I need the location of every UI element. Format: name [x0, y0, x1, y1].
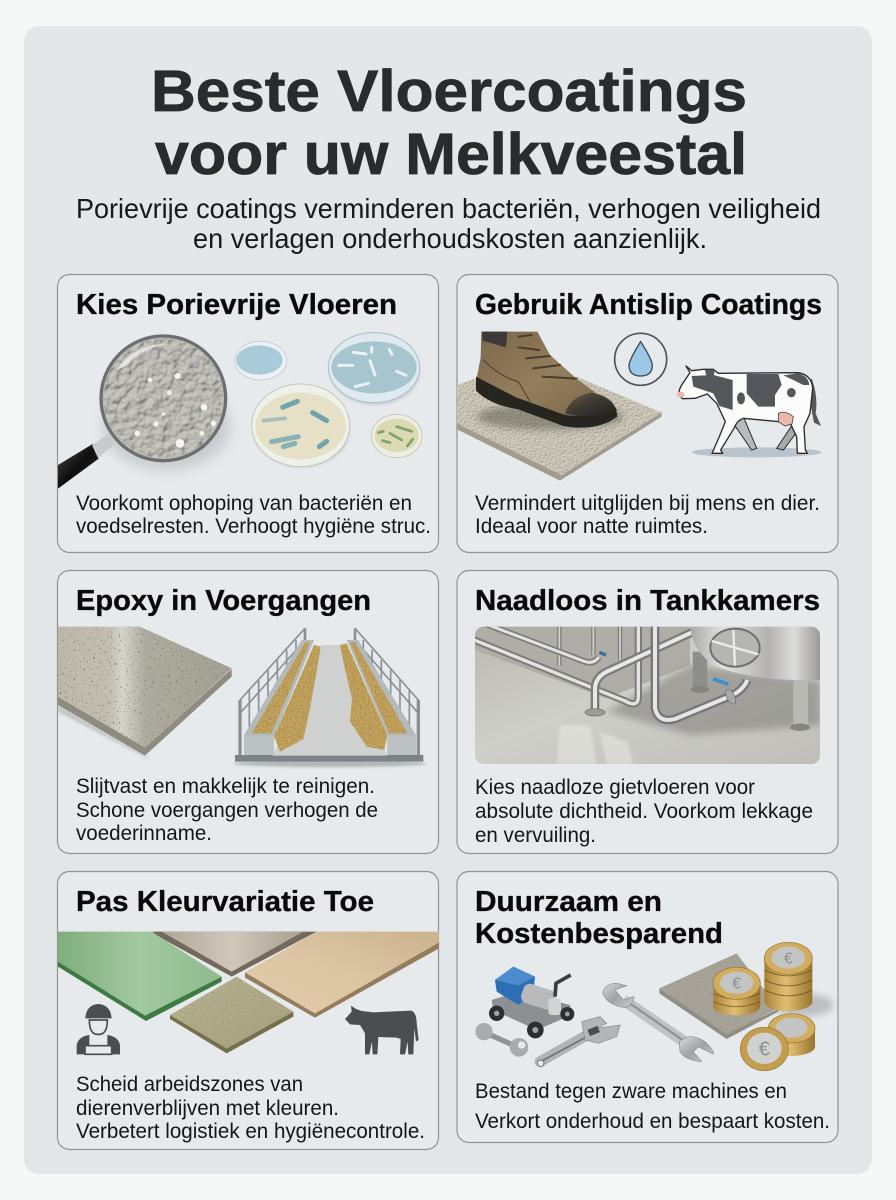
- illustration: colour zones: [58, 932, 439, 1054]
- panel: Gebruik Antislip Coatings: [457, 274, 838, 552]
- body text: Bestand tegen zware machines en: [475, 1080, 787, 1103]
- body text: Ideaal voor natte ruimtes.: [475, 515, 708, 538]
- body text: voedselresten. Verhoogt hygiëne struc.: [76, 515, 431, 538]
- icon: large wrench: [603, 983, 714, 1062]
- body text: absolute dichtheid. Voorkom lekkage: [475, 800, 813, 823]
- body text: Scheid arbeidszones van: [76, 1073, 303, 1096]
- body text: [475, 1080, 830, 1133]
- icon: beige petri dish with bacteria: [252, 384, 350, 467]
- body text: [475, 776, 813, 847]
- illustration: magnifier and petri dishes: [58, 333, 422, 489]
- right fence: [355, 628, 418, 755]
- icon: floor machine: [489, 967, 574, 1038]
- icon: coin stacks: €: [784, 950, 793, 967]
- title: Beste Vloercoatings: [151, 59, 747, 124]
- panel: Epoxy in Voergangen: [58, 570, 438, 854]
- body text: [76, 1073, 425, 1143]
- illustration: epoxy slab and feed alley: [58, 627, 427, 767]
- icon: work boot: [476, 332, 623, 430]
- body text: Vermindert uitglijden bij mens en dier.: [475, 492, 820, 515]
- body text: Voorkomt ophoping van bacteriën en: [76, 492, 412, 515]
- icon: coin stacks: €: [732, 975, 741, 992]
- anti-slip mat: [457, 377, 662, 481]
- heading: Kies Porievrije Vloeren: Kies Porievrije Vloeren: [76, 289, 397, 321]
- panel: Duurzaam en Kostenbesparend: [457, 872, 838, 1142]
- icon: worker: [77, 1004, 120, 1054]
- icon: large blue petri dish: [328, 333, 420, 405]
- floor: [475, 627, 820, 764]
- spilled feed: [274, 645, 321, 752]
- epoxy sample slab: [58, 627, 232, 760]
- heading: Gebruik Antislip Coatings: Gebruik Antislip Coatings: [475, 289, 822, 321]
- concrete slab: [659, 953, 778, 1039]
- blue valves: [713, 679, 728, 684]
- title: [151, 59, 747, 187]
- icon: small green petri dish: [371, 414, 422, 458]
- subtitle: en verlagen onderhoudskosten aanzienlijk.: [193, 223, 707, 254]
- center aisle: [273, 645, 387, 756]
- icon: holstein cow: [677, 366, 822, 457]
- illustration: machine, tools, slab and coins: [475, 942, 833, 1071]
- body text: Verbetert logistiek en hygiënecontrole.: [76, 1120, 425, 1143]
- icon: small wrench: [475, 1023, 528, 1057]
- icon: cow silhouette: [345, 1006, 419, 1054]
- body text: en vervuiling.: [475, 824, 596, 847]
- icon: coin stacks: [713, 942, 833, 1071]
- tank: [690, 627, 820, 680]
- body text: voederinname.: [76, 822, 212, 845]
- body text: [475, 492, 820, 538]
- feed alley with troughs: [233, 628, 427, 767]
- left trough: [244, 640, 314, 736]
- panel: Naadloos in Tankkamers: [457, 570, 838, 854]
- panel: Kies Porievrije Vloeren: [58, 274, 438, 552]
- icon: magnifying glass: [58, 334, 230, 489]
- icon: small blue petri dish: [235, 341, 287, 380]
- right trough: [347, 640, 416, 755]
- heading: Duurzaam en Kostenbesparend: [475, 886, 723, 950]
- heading: Duurzaam en Kostenbesparend: Duurzaam en: [475, 886, 662, 918]
- body text: [76, 492, 431, 538]
- body text: [76, 775, 378, 845]
- body text: dierenverblijven met kleuren.: [76, 1097, 339, 1120]
- tank legs: [693, 652, 707, 688]
- green slab: [58, 932, 222, 1021]
- subtitle: Porievrije coatings verminderen bacteriën, verhogen veiligheid: [76, 193, 821, 224]
- taupe slab: [153, 932, 317, 977]
- panel: Pas Kleurvariatie Toe: [58, 872, 439, 1150]
- illustration: boot, water drop and cow: [457, 332, 822, 481]
- icon: coin stacks: €: [759, 1039, 770, 1061]
- olive slab: [170, 977, 293, 1053]
- body text: Schone voergangen verhogen de: [76, 799, 378, 822]
- body text: Kies naadloze gietvloeren voor: [475, 776, 755, 799]
- heading: Naadloos in Tankkamers: Naadloos in Tankkamers: [475, 585, 820, 617]
- heading: Pas Kleurvariatie Toe: Pas Kleurvariatie Toe: [76, 886, 374, 918]
- icon: adjustable wrench: [537, 1017, 620, 1067]
- tan slab: [245, 932, 439, 1018]
- title: voor uw Melkveestal: [155, 122, 747, 187]
- icon: water drop in circle: [615, 333, 667, 385]
- heading: Epoxy in Voergangen: Epoxy in Voergangen: [76, 585, 371, 617]
- pipes: [473, 624, 692, 712]
- body text: Slijtvast en makkelijk te reinigen.: [76, 775, 375, 798]
- photo: seamless floor with pipes and tank: [473, 624, 820, 764]
- heading: Duurzaam en Kostenbesparend: Kostenbesparend: [475, 918, 723, 950]
- body text: Verkort onderhoud en bespaart kosten.: [475, 1110, 830, 1133]
- subtitle: [76, 193, 821, 254]
- left fence: [240, 628, 305, 755]
